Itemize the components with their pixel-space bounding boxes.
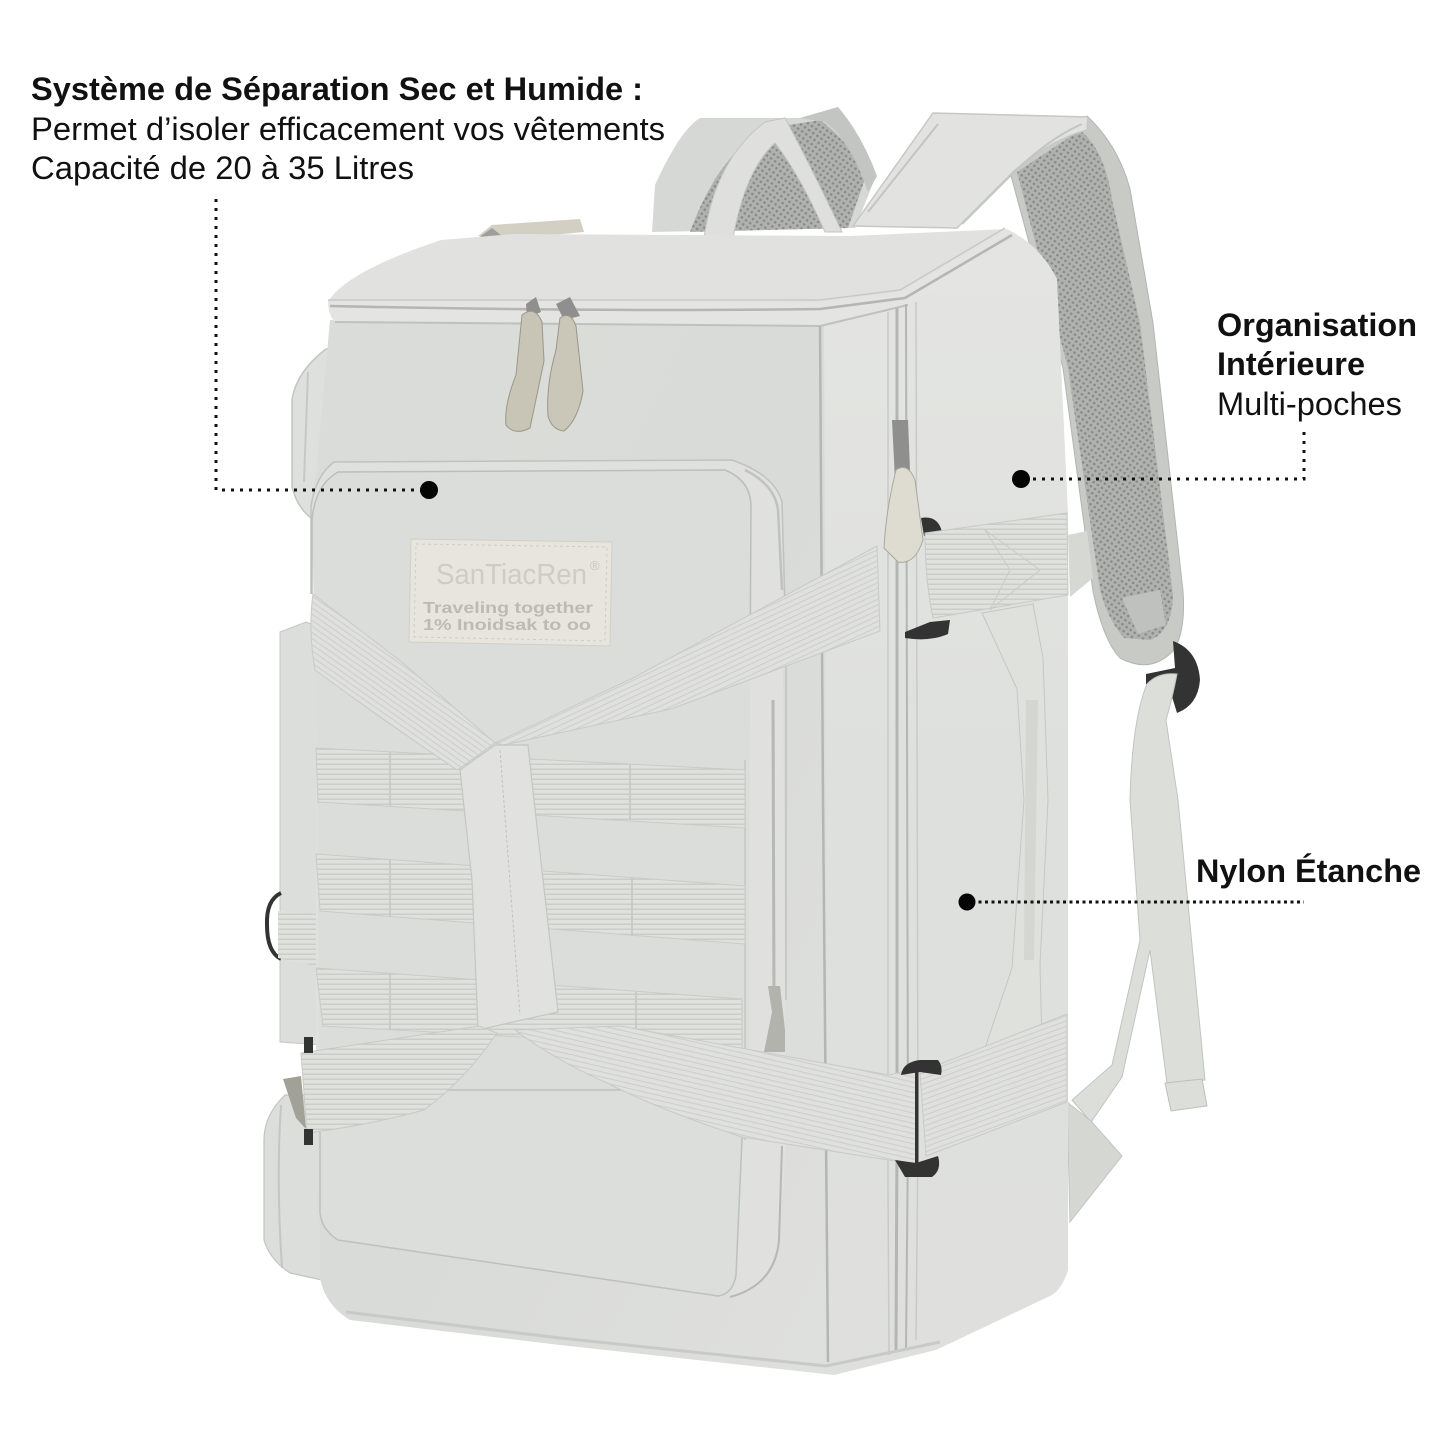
lower buckles	[304, 1037, 942, 1177]
bottom seam	[346, 1312, 940, 1366]
side strap, lower	[920, 1014, 1067, 1156]
front corner seam	[820, 326, 828, 1362]
lower left strap	[301, 1026, 497, 1133]
callout: interior organisation	[1217, 307, 1417, 422]
brand patch: 1% Inoidsak to oo	[423, 617, 591, 634]
webbing rows	[316, 748, 745, 1049]
zipper band	[328, 228, 1020, 326]
lower front zipper slider	[764, 986, 785, 1052]
description line 1: Permet d’isoler efficacement vos vêtements	[31, 111, 665, 147]
center handle	[460, 745, 558, 1030]
heading: Système de Séparation Sec et Humide :	[31, 71, 643, 107]
dotted leader: separation	[216, 199, 438, 499]
top carry handle	[704, 118, 842, 238]
upper side zipper slider	[884, 420, 923, 562]
left metal clip	[283, 1076, 306, 1129]
left mid side pocket	[280, 622, 322, 1045]
left side bump pocket	[292, 349, 330, 520]
side vertical zipper	[888, 302, 918, 1355]
backpack right side panel	[820, 229, 1068, 1375]
callout: interior organisation: Intérieure	[1217, 346, 1365, 382]
dotted leader: organisation	[1012, 432, 1304, 488]
lower front pocket	[320, 1090, 742, 1296]
webbing row 2	[316, 854, 745, 944]
upper left strap	[311, 594, 495, 770]
webbing row 1	[316, 748, 745, 828]
top zipper pull, back	[478, 219, 584, 238]
webbing row 3	[316, 968, 742, 1049]
backpack front panel	[312, 320, 834, 1375]
callout: interior organisation: Organisation	[1217, 307, 1417, 343]
brand patch: ®	[590, 558, 600, 573]
dotted leader: nylon	[958, 894, 1304, 910]
D-ring	[267, 893, 281, 959]
upper right buckle	[905, 518, 950, 639]
right shoulder strap	[853, 113, 1184, 665]
brand patch: Traveling together	[423, 600, 593, 617]
upper front pocket	[311, 460, 786, 1297]
back-left shoulder strap	[652, 107, 877, 232]
callout: interior organisation: Multi-poches	[1217, 386, 1402, 422]
front pocket zipper	[730, 700, 782, 1297]
side carry handle	[981, 604, 1048, 1060]
description line 2: Capacité de 20 à 35 Litres	[31, 150, 414, 186]
left lower side pocket	[264, 1095, 322, 1280]
callout: waterproof nylon: Nylon Étanche	[1196, 853, 1421, 889]
D-ring webbing	[278, 911, 316, 966]
upper right strap	[495, 546, 880, 745]
brand patch	[409, 539, 612, 646]
top lid	[328, 229, 1007, 302]
brand patch: SanTiacRen	[436, 559, 587, 591]
lower shoulder strap and adjuster	[1067, 531, 1207, 1222]
callout: dry and wet separation	[31, 71, 665, 186]
top zipper pulls	[506, 297, 583, 431]
side strap, upper	[925, 513, 1068, 618]
lower right strap	[515, 1026, 917, 1163]
